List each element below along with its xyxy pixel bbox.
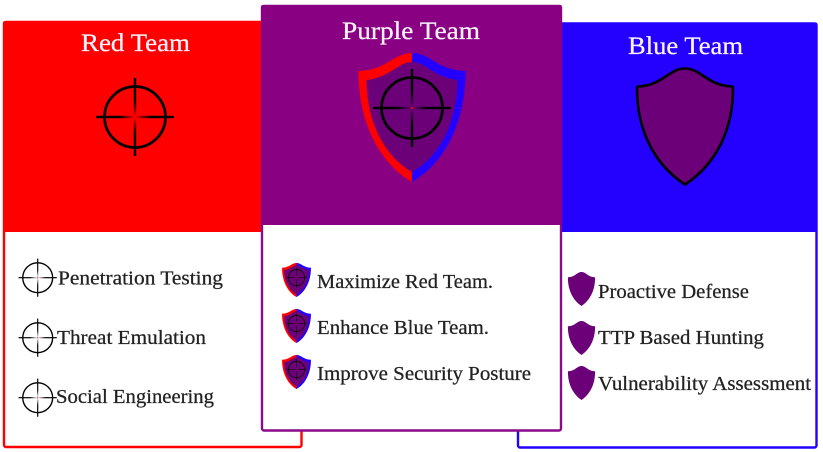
icon: shield 3 [568,366,595,400]
red team header [3,21,300,232]
purple team header [261,5,562,225]
text: ttp based hunting: TTP Based Hunting [598,328,764,349]
text: maximize red team: Maximize Red Team. [317,272,493,293]
icon: crosshair 1 [19,259,57,297]
icon: blue team shield [637,68,733,184]
icon: red crosshair [96,78,174,156]
text: social engineering: Social Engineering [56,387,214,408]
panel: purple team [261,5,562,430]
icon: purple shield with crosshair [358,53,466,182]
list: purple team items [282,263,531,389]
text: threat emulation: Threat Emulation [57,328,206,349]
icon: shield 1 [568,272,595,306]
icon: crosshair 3 [19,379,57,417]
list: blue team items [568,272,812,400]
text: improve security posture: Improve Security Posture [317,364,531,385]
text: penetration testing: Penetration Testing [58,268,223,290]
icon: mini shield 1 [282,263,311,297]
blue team header [540,22,818,232]
icon: shield 2 [568,321,595,355]
icon: crosshair 2 [19,319,57,357]
heading: red team: Red Team [81,28,190,57]
panel: blue team [518,22,818,448]
list: red team items [19,259,223,417]
text: vulnerability assessment: Vulnerability Assessment [598,374,812,395]
icon: mini shield 2 [282,309,311,343]
text: enhance blue team: Enhance Blue Team. [317,318,489,339]
panel: red team [3,21,302,447]
icon: mini shield 3 [282,355,311,389]
heading: blue team: Blue Team [628,31,743,60]
heading: purple team: Purple Team [342,16,480,45]
text: proactive defense: Proactive Defense [598,282,749,303]
